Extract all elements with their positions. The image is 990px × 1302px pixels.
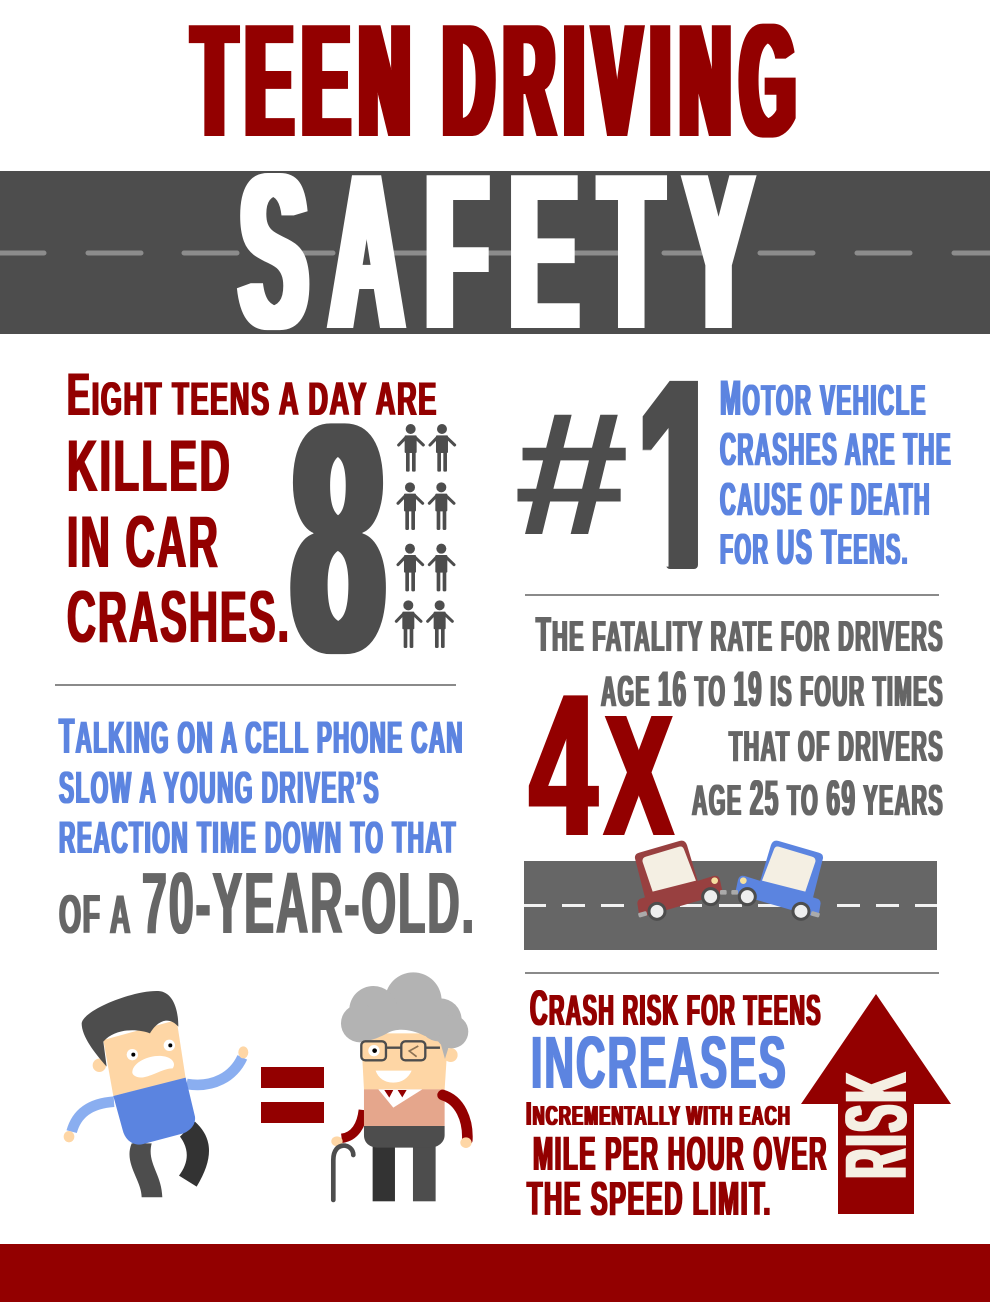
icon: young driver bbox=[64, 991, 248, 1197]
text: 1 bbox=[636, 313, 723, 667]
icons: eight people bbox=[396, 424, 455, 648]
big numeral 8: 8 bbox=[292, 357, 384, 721]
text: increases: INCREASES bbox=[531, 1021, 788, 1104]
text: fatality rate bbox=[536, 608, 944, 826]
big hash sign: # bbox=[515, 377, 628, 572]
text: incrementally with each: INCREMENTALLY WITH EACH bbox=[526, 1095, 791, 1132]
text: talking on a cell phone bbox=[59, 708, 464, 863]
text: of a 70-year-old: 70-YEAR-OLD. bbox=[142, 855, 476, 952]
big 4x: 4X bbox=[530, 652, 681, 879]
text: talking on a cell phone: TALKING ON A CELL PHONE CAN bbox=[59, 708, 464, 764]
equals sign bbox=[261, 1067, 324, 1123]
icon: blue car bbox=[731, 841, 823, 919]
text: crashes: CRASHES. bbox=[67, 577, 291, 658]
icon: old man bbox=[331, 972, 472, 1201]
text: the speed limit: THE SPEED LIMIT. bbox=[527, 1173, 772, 1226]
text: motor vehicle crashes bbox=[720, 370, 952, 575]
divider bbox=[525, 972, 939, 974]
text: talking on a cell phone: SLOW A YOUNG DRIVER’S bbox=[59, 762, 380, 813]
small road with crashing cars bbox=[524, 841, 937, 950]
text: of a 70-year-old: OF A bbox=[59, 883, 132, 945]
icon: risk arrow: RISK bbox=[828, 1070, 925, 1178]
text: motor vehicle crashes: FOR US TEENS. bbox=[720, 519, 909, 575]
text: in car: IN CAR bbox=[67, 502, 220, 583]
icon: risk arrow bbox=[801, 994, 951, 1214]
text: killed: KILLED bbox=[67, 426, 232, 507]
divider bbox=[525, 594, 939, 596]
road banner bbox=[0, 171, 990, 334]
text: of a 70-year-old bbox=[59, 855, 476, 952]
text: talking on a cell phone: REACTION TIME DOWN TO THAT bbox=[59, 812, 457, 863]
divider bbox=[55, 684, 456, 686]
text: eight teens a day are: EIGHT TEENS A DAY ARE bbox=[67, 361, 438, 428]
icon: red car bbox=[635, 841, 727, 919]
footer bar bbox=[0, 1244, 990, 1302]
